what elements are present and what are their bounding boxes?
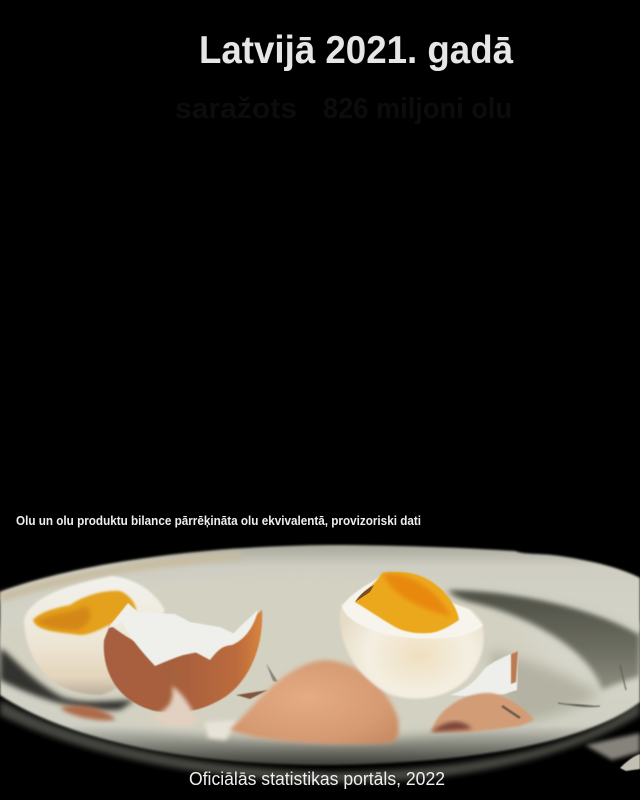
shadow left	[0, 648, 135, 710]
plate	[0, 545, 640, 765]
subtitle: dark text on black	[175, 93, 512, 125]
shell fragments	[60, 663, 278, 740]
broken brown shell	[104, 603, 262, 713]
small blurred shell right	[431, 693, 534, 733]
floor of plate right	[490, 650, 600, 724]
subtitle: dark text on black: saražots	[175, 93, 297, 125]
scuffs	[558, 665, 626, 707]
caption: Olu un olu produktu bilance pārrēķināta olu ekvivalentā, provizoriski dati	[16, 514, 421, 528]
front blurred egg	[230, 660, 399, 744]
subtitle: dark text on black: 826 miljoni olu	[323, 93, 512, 125]
plate underside shadow	[0, 700, 640, 782]
warm tone on rim	[0, 556, 240, 598]
shell by right egg	[450, 651, 518, 696]
footer source: Oficiālās statistikas portāls, 2022	[189, 769, 445, 789]
plate foot	[585, 733, 640, 771]
rim highlight right	[440, 582, 640, 628]
left soft-boiled egg	[24, 576, 165, 695]
plate well	[0, 578, 580, 738]
right boiled egg	[340, 572, 484, 699]
inner wall right	[448, 590, 640, 690]
title: Latvijā 2021. gadā	[199, 29, 513, 72]
